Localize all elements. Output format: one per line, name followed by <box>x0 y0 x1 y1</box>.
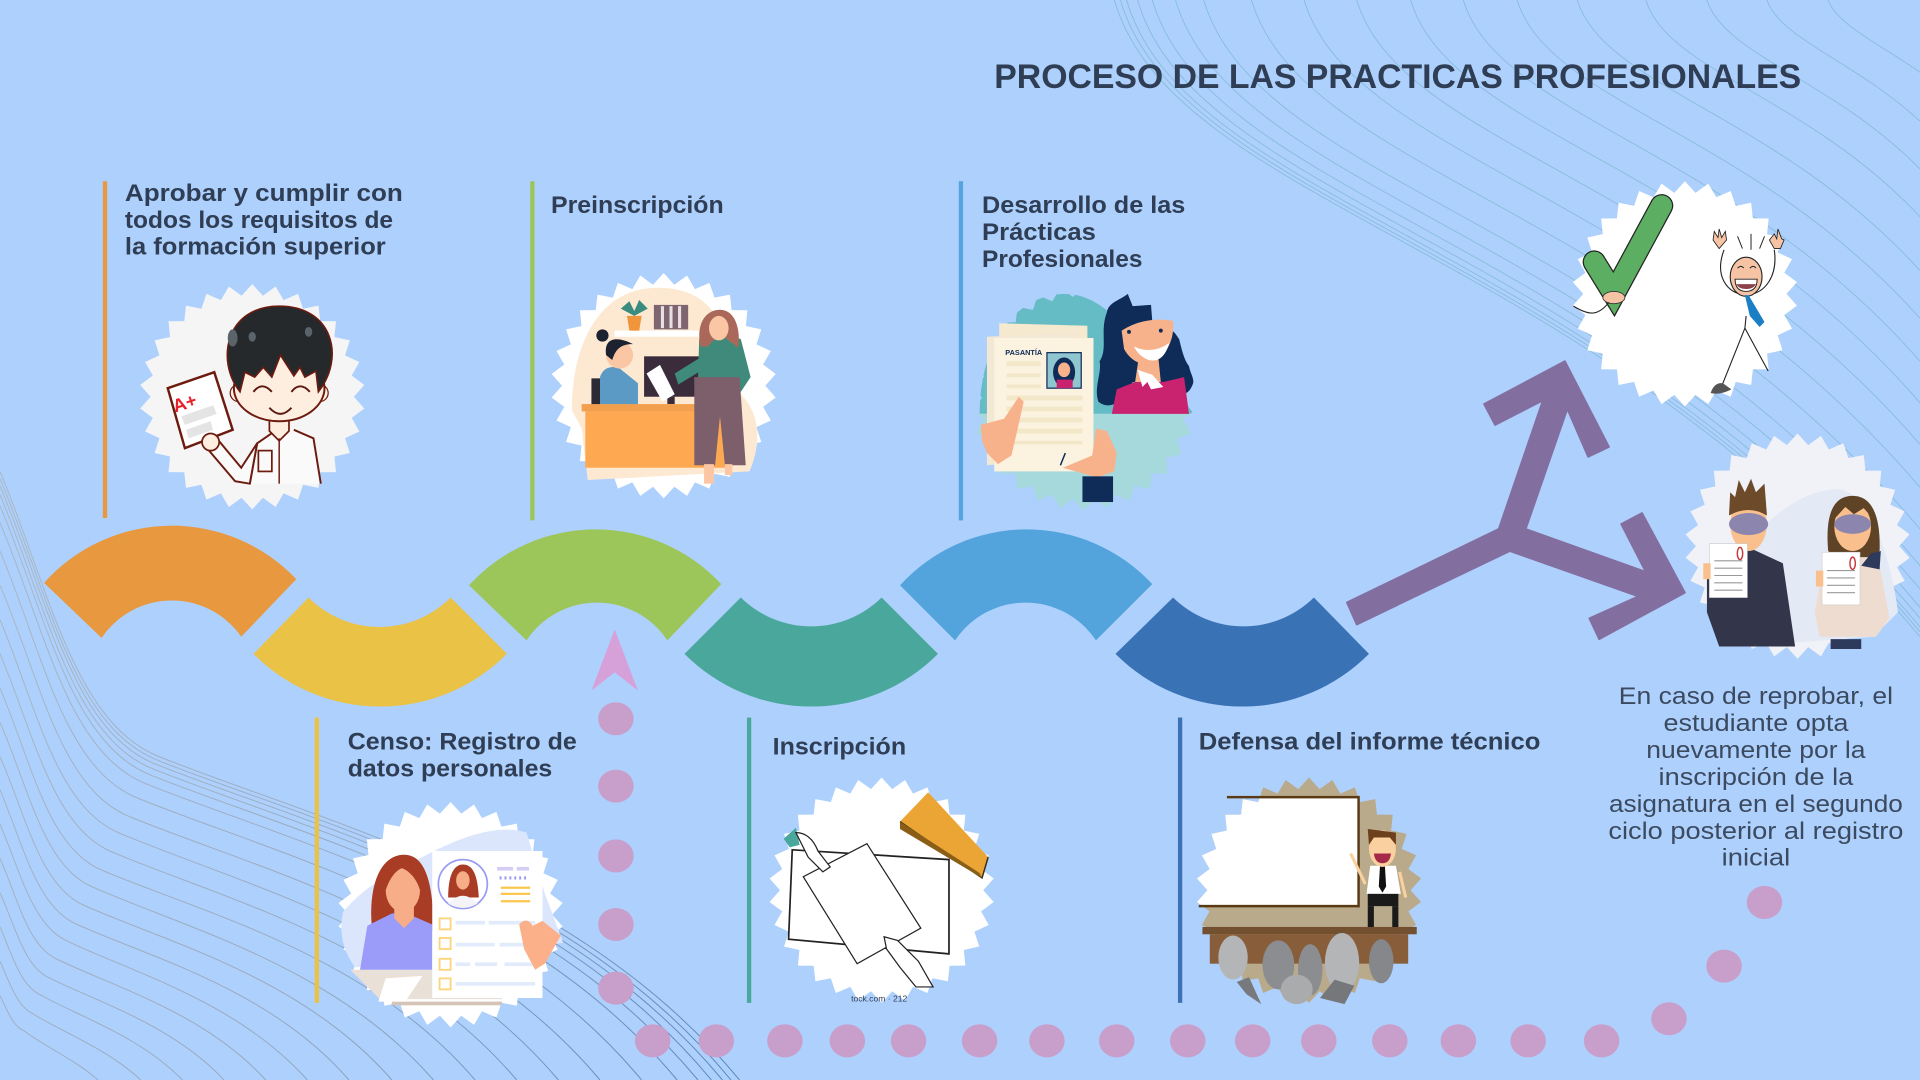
segment 1: orange <box>44 526 296 638</box>
heading: desarrollo: Desarrollo de las <box>982 192 1185 219</box>
text: failure note: En caso de reprobar, el <box>1619 683 1893 710</box>
icon: man presenting at a board to an audience <box>1197 778 1421 1004</box>
heading: censo: Censo: Registro de <box>348 728 577 755</box>
arrow: branching outcome arrow <box>1347 361 1685 639</box>
text: failure note: nuevamente por la <box>1646 737 1866 764</box>
badge background <box>972 285 1196 511</box>
heading: step 1: todos los requisitos de <box>125 207 393 234</box>
text: failure note: asignatura en el segundo <box>1609 791 1903 818</box>
icon: receptionist and visitor <box>552 273 776 498</box>
icon: hands exchanging sheets of paper <box>770 778 994 1004</box>
segment 4: teal <box>684 598 938 707</box>
icon: check mark and happy stick figure <box>1573 181 1797 407</box>
heading: defensa: Defensa del informe técnico <box>1199 728 1540 755</box>
heading: preinscripcion: Preinscripción <box>551 192 724 219</box>
text: failure note: inscripción de la <box>1659 764 1854 791</box>
heading: censo <box>348 728 577 782</box>
icon: woman presenting internship document: PASANTÍA <box>1005 348 1043 357</box>
heading: step 1 <box>125 180 403 261</box>
segment 3: green <box>469 529 721 640</box>
segment 5: light blue <box>900 529 1152 640</box>
background pattern: top right contour lines <box>1114 0 1920 637</box>
text: failure note: inicial <box>1722 845 1790 872</box>
text: failure note: estudiante opta <box>1663 710 1849 737</box>
icon: woman and CV form <box>339 802 563 1027</box>
heading: inscripcion: Inscripción <box>773 733 906 760</box>
background pattern: bottom left contour lines <box>0 471 740 1080</box>
icon: hands exchanging sheets of paper: tock.com · 212 <box>851 994 907 1004</box>
arrow head: pink pointer to preinscripcion <box>591 629 638 691</box>
icon: boy holding A+ paper <box>140 284 364 509</box>
title: PROCESO DE LAS PRACTICAS PROFESIONALES <box>994 58 1801 96</box>
icon: woman presenting internship document <box>972 285 1196 511</box>
heading: desarrollo <box>982 192 1185 273</box>
segment 6: dark blue <box>1116 598 1369 707</box>
icon: boy holding A+ paper: A+ <box>170 389 199 416</box>
heading: desarrollo: Prácticas <box>982 219 1096 246</box>
text: failure note: ciclo posterior al registro <box>1608 818 1903 845</box>
heading: desarrollo: Profesionales <box>982 246 1142 273</box>
wave timeline <box>44 526 1369 707</box>
heading: censo: datos personales <box>348 755 552 782</box>
segment 2: yellow <box>253 598 507 707</box>
step bars <box>103 181 1182 1003</box>
text: failure note <box>1608 683 1903 872</box>
heading: step 1: la formación superior <box>125 234 386 261</box>
icon: two students with failing grades <box>1686 433 1910 659</box>
heading: step 1: Aprobar y cumplir con <box>125 180 403 207</box>
arrow: dotted return path <box>598 702 1782 1057</box>
